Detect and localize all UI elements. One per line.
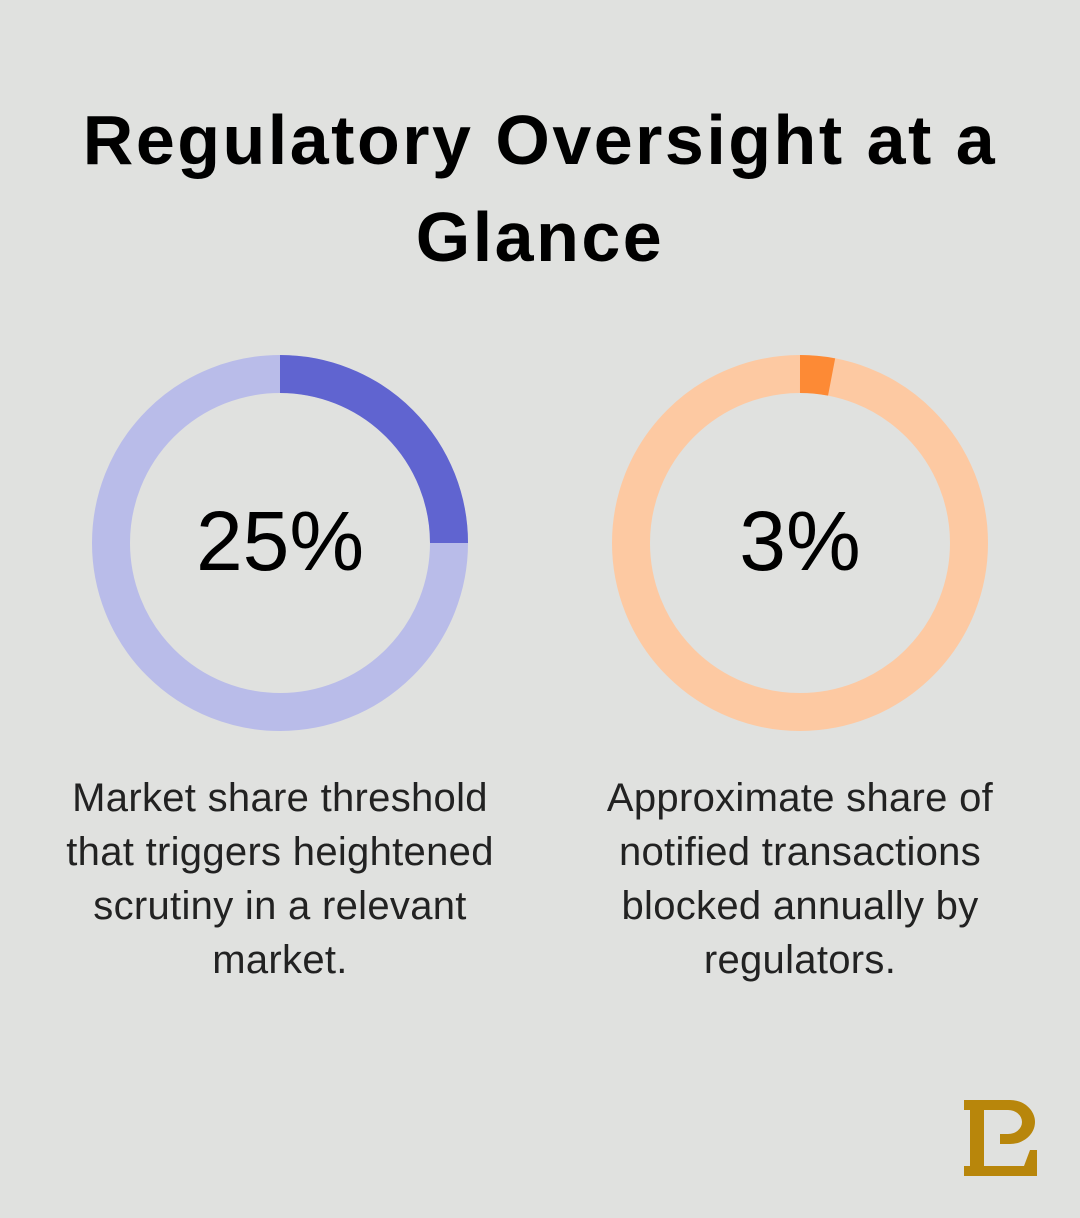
text: 3% description: blocked annually by <box>621 884 979 928</box>
text: 25% description: market. <box>212 938 348 982</box>
text: 3% description: notified transactions <box>619 830 981 874</box>
donut: 3%: 3% <box>739 494 861 588</box>
title: Glance <box>416 198 664 276</box>
text: 3% description <box>607 776 993 982</box>
text: 3% description: Approximate share of <box>607 776 993 820</box>
text: 25% description: that triggers heightened <box>66 830 494 874</box>
donut: 3% <box>631 374 969 712</box>
title <box>83 101 997 276</box>
text: 25% description: scrutiny in a relevant <box>93 884 467 928</box>
text: 25% description <box>66 776 494 982</box>
logo <box>964 1100 1037 1176</box>
donut: 25%: 25% <box>196 494 364 588</box>
donut: 25% <box>111 374 449 712</box>
title: Regulatory Oversight at a <box>83 101 997 179</box>
text: 25% description: Market share threshold <box>72 776 488 820</box>
text: 3% description: regulators. <box>704 938 896 982</box>
